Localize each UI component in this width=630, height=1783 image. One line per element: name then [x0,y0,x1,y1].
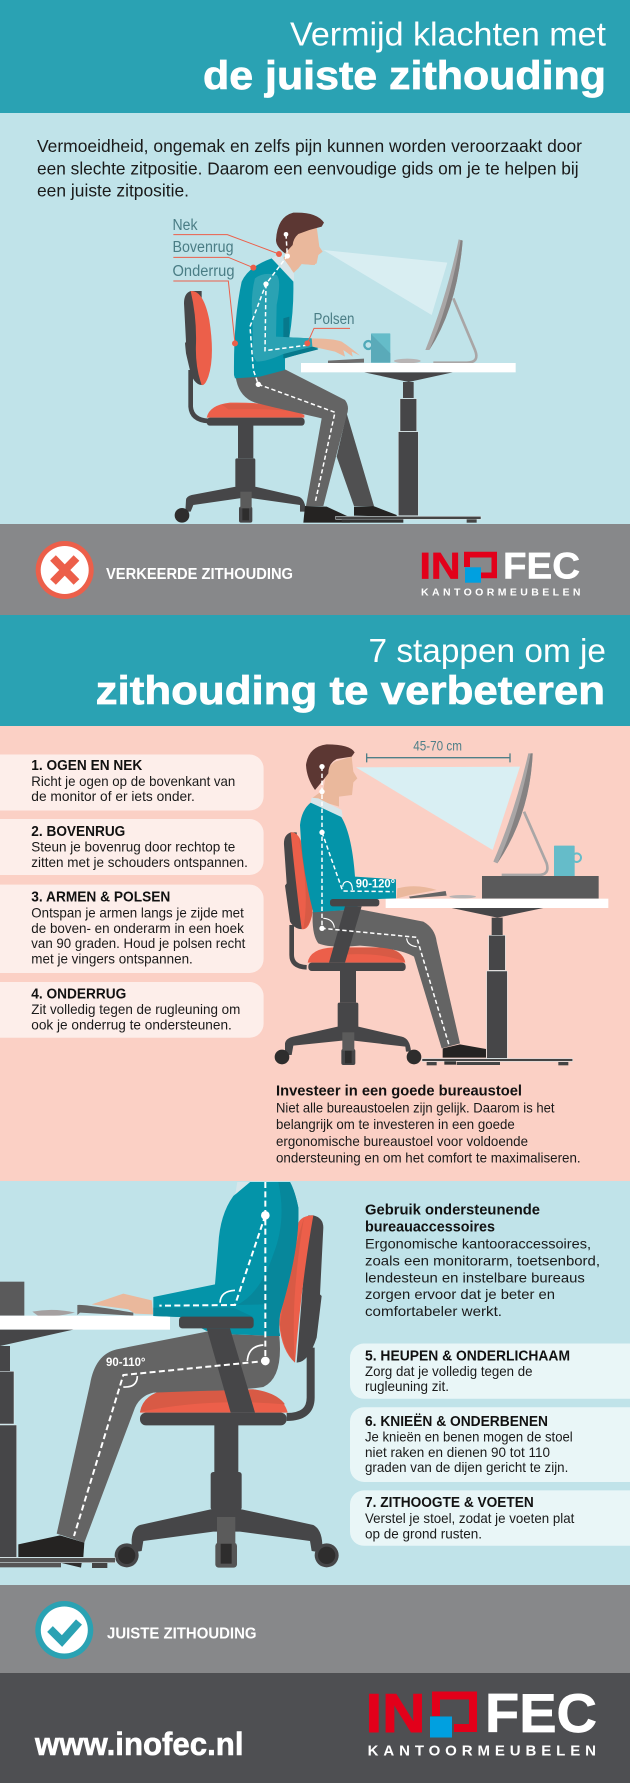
step card 5: rugleuning zit. [365,1378,449,1394]
text block: office chair: Niet alle bureaustoelen zijn gelijk. Daarom is het [276,1100,555,1116]
logo: small [420,545,580,599]
text block: accessories: comfortabeler werkt. [365,1303,502,1319]
step card 6: graden van de dijen gericht te zijn. [365,1459,568,1475]
step card 3: met je vingers ontspannen. [31,950,193,966]
step card 5 [350,1344,630,1399]
intro text [37,136,582,200]
labels: body points: Polsen [314,311,354,328]
panel: wrong posture bar [0,524,630,615]
step card 1: Richt je ogen op de bovenkant van [31,773,235,789]
panel: footer: www.inofec.nl [34,1726,243,1762]
panel: second header [0,615,630,726]
panel: steps 5-7 [0,1181,630,1585]
panel: second header: 7 stappen om je [368,632,606,669]
step card 7: Verstel je stoel, zodat je voeten plat [365,1510,574,1526]
step card 3: Ontspan je armen langs je zijde met [31,905,244,921]
icon: red cross [36,541,94,599]
logo: large: KANTOORMEUBELEN [368,1743,596,1760]
step card 3 [0,885,264,973]
text block: accessories: bureauaccessoires [365,1220,495,1236]
step card 7: op de grond rusten. [365,1525,482,1541]
step card 3: de boven- en onderarm in een hoek [31,920,245,936]
step card 2 [0,819,264,875]
step card 2: Steun je bovenrug door rechtop te [31,838,236,854]
step card 3: van 90 graden. Houd je polsen recht [31,935,245,951]
logo: large [366,1682,597,1760]
step card 1: de monitor of er iets onder. [31,788,195,804]
step card 6: niet raken en dienen 90 tot 110 [365,1444,550,1460]
text block: office chair: belangrijk om te investeren in een goede [276,1116,515,1132]
illustration: correct posture at desk [275,744,608,1065]
panel: correct posture bar: JUISTE ZITHOUDING [107,1625,256,1642]
labels: body points: Bovenrug [172,239,234,256]
step card 4: ook je onderrug te ondersteunen. [31,1016,232,1032]
step card 1: 1. OGEN EN NEK [31,758,143,774]
intro text: een slechte zitpositie. Daarom een eenvoudige gids om je te helpen bij [37,158,579,178]
step card 4 [0,982,264,1038]
step card 4: 4. ONDERRUG [31,986,126,1002]
intro text: een juiste zitpositie. [37,180,189,200]
labels: body points: Onderrug [172,263,234,280]
text block: office chair: ondersteuning en om het comfort te maximaliseren. [276,1150,581,1166]
step card 6: 6. KNIEËN & ONDERBENEN [365,1413,548,1430]
panel: correct posture bar [0,1585,630,1673]
logo: small: IN [420,545,460,586]
step card 2: zitten met je schouders ontspannen. [31,854,248,870]
label: arm angle: 90-120° [356,876,395,890]
step card 1 [0,754,264,810]
panel: top header [0,0,630,113]
intro text: Vermoeidheid, ongemak en zelfs pijn kunnen worden veroorzaakt door [37,136,582,156]
text block: accessories: Gebruik ondersteunende [365,1203,540,1219]
text block: accessories: zoals een monitorarm, toetsenbord, [365,1252,600,1268]
panel: footer [0,1673,630,1783]
step card 4: Zit volledig tegen de rugleuning om [31,1001,240,1017]
panel: top header: de juiste zithouding [203,54,606,98]
panel: top header: Vermijd klachten met [290,16,606,52]
icon: check mark [35,1601,93,1659]
step card 5: Zorg dat je volledig tegen de [365,1363,533,1379]
illustration: close-up lower body and chair [0,1182,339,1568]
panel: steps 1-4 [0,726,630,1181]
labels: body points [172,217,354,328]
text block: accessories: zorgen ervoor dat je beter en [365,1286,555,1302]
text block: office chair [276,1084,581,1166]
logo: large: FEC [485,1682,597,1744]
step card 6: Je knieën en benen mogen de stoel [365,1428,573,1444]
step card 5: 5. HEUPEN & ONDERLICHAAM [365,1348,570,1364]
text block: accessories: lendesteun en instelbare bureaus [365,1269,585,1285]
panel: wrong posture [0,113,630,524]
text block: accessories [365,1203,600,1319]
label: knee angle: 90-110° [106,1355,146,1369]
step card 2: 2. BOVENRUG [31,824,125,840]
step card 7: 7. ZITHOOGTE & VOETEN [365,1495,534,1511]
text block: office chair: Investeer in een goede bureaustoel [276,1084,522,1100]
panel: wrong posture bar: VERKEERDE ZITHOUDING [106,566,293,583]
logo: large: IN [366,1682,426,1744]
step card 7 [350,1490,630,1546]
step card 6 [350,1407,630,1482]
logo: small: FEC [503,545,580,586]
logo: small: KANTOORMEUBELEN [421,587,580,599]
labels: body points: Nek [172,217,198,234]
text block: office chair: ergonomische bureaustoel voor voldoende [276,1133,528,1149]
label: monitor distance: 45-70 cm [413,738,462,754]
panel: second header: zithouding te verbeteren [96,669,605,713]
step card 3: 3. ARMEN & POLSEN [31,890,170,906]
text block: accessories: Ergonomische kantooraccessoires, [365,1236,591,1252]
illustration: wrong posture at desk [173,213,516,523]
